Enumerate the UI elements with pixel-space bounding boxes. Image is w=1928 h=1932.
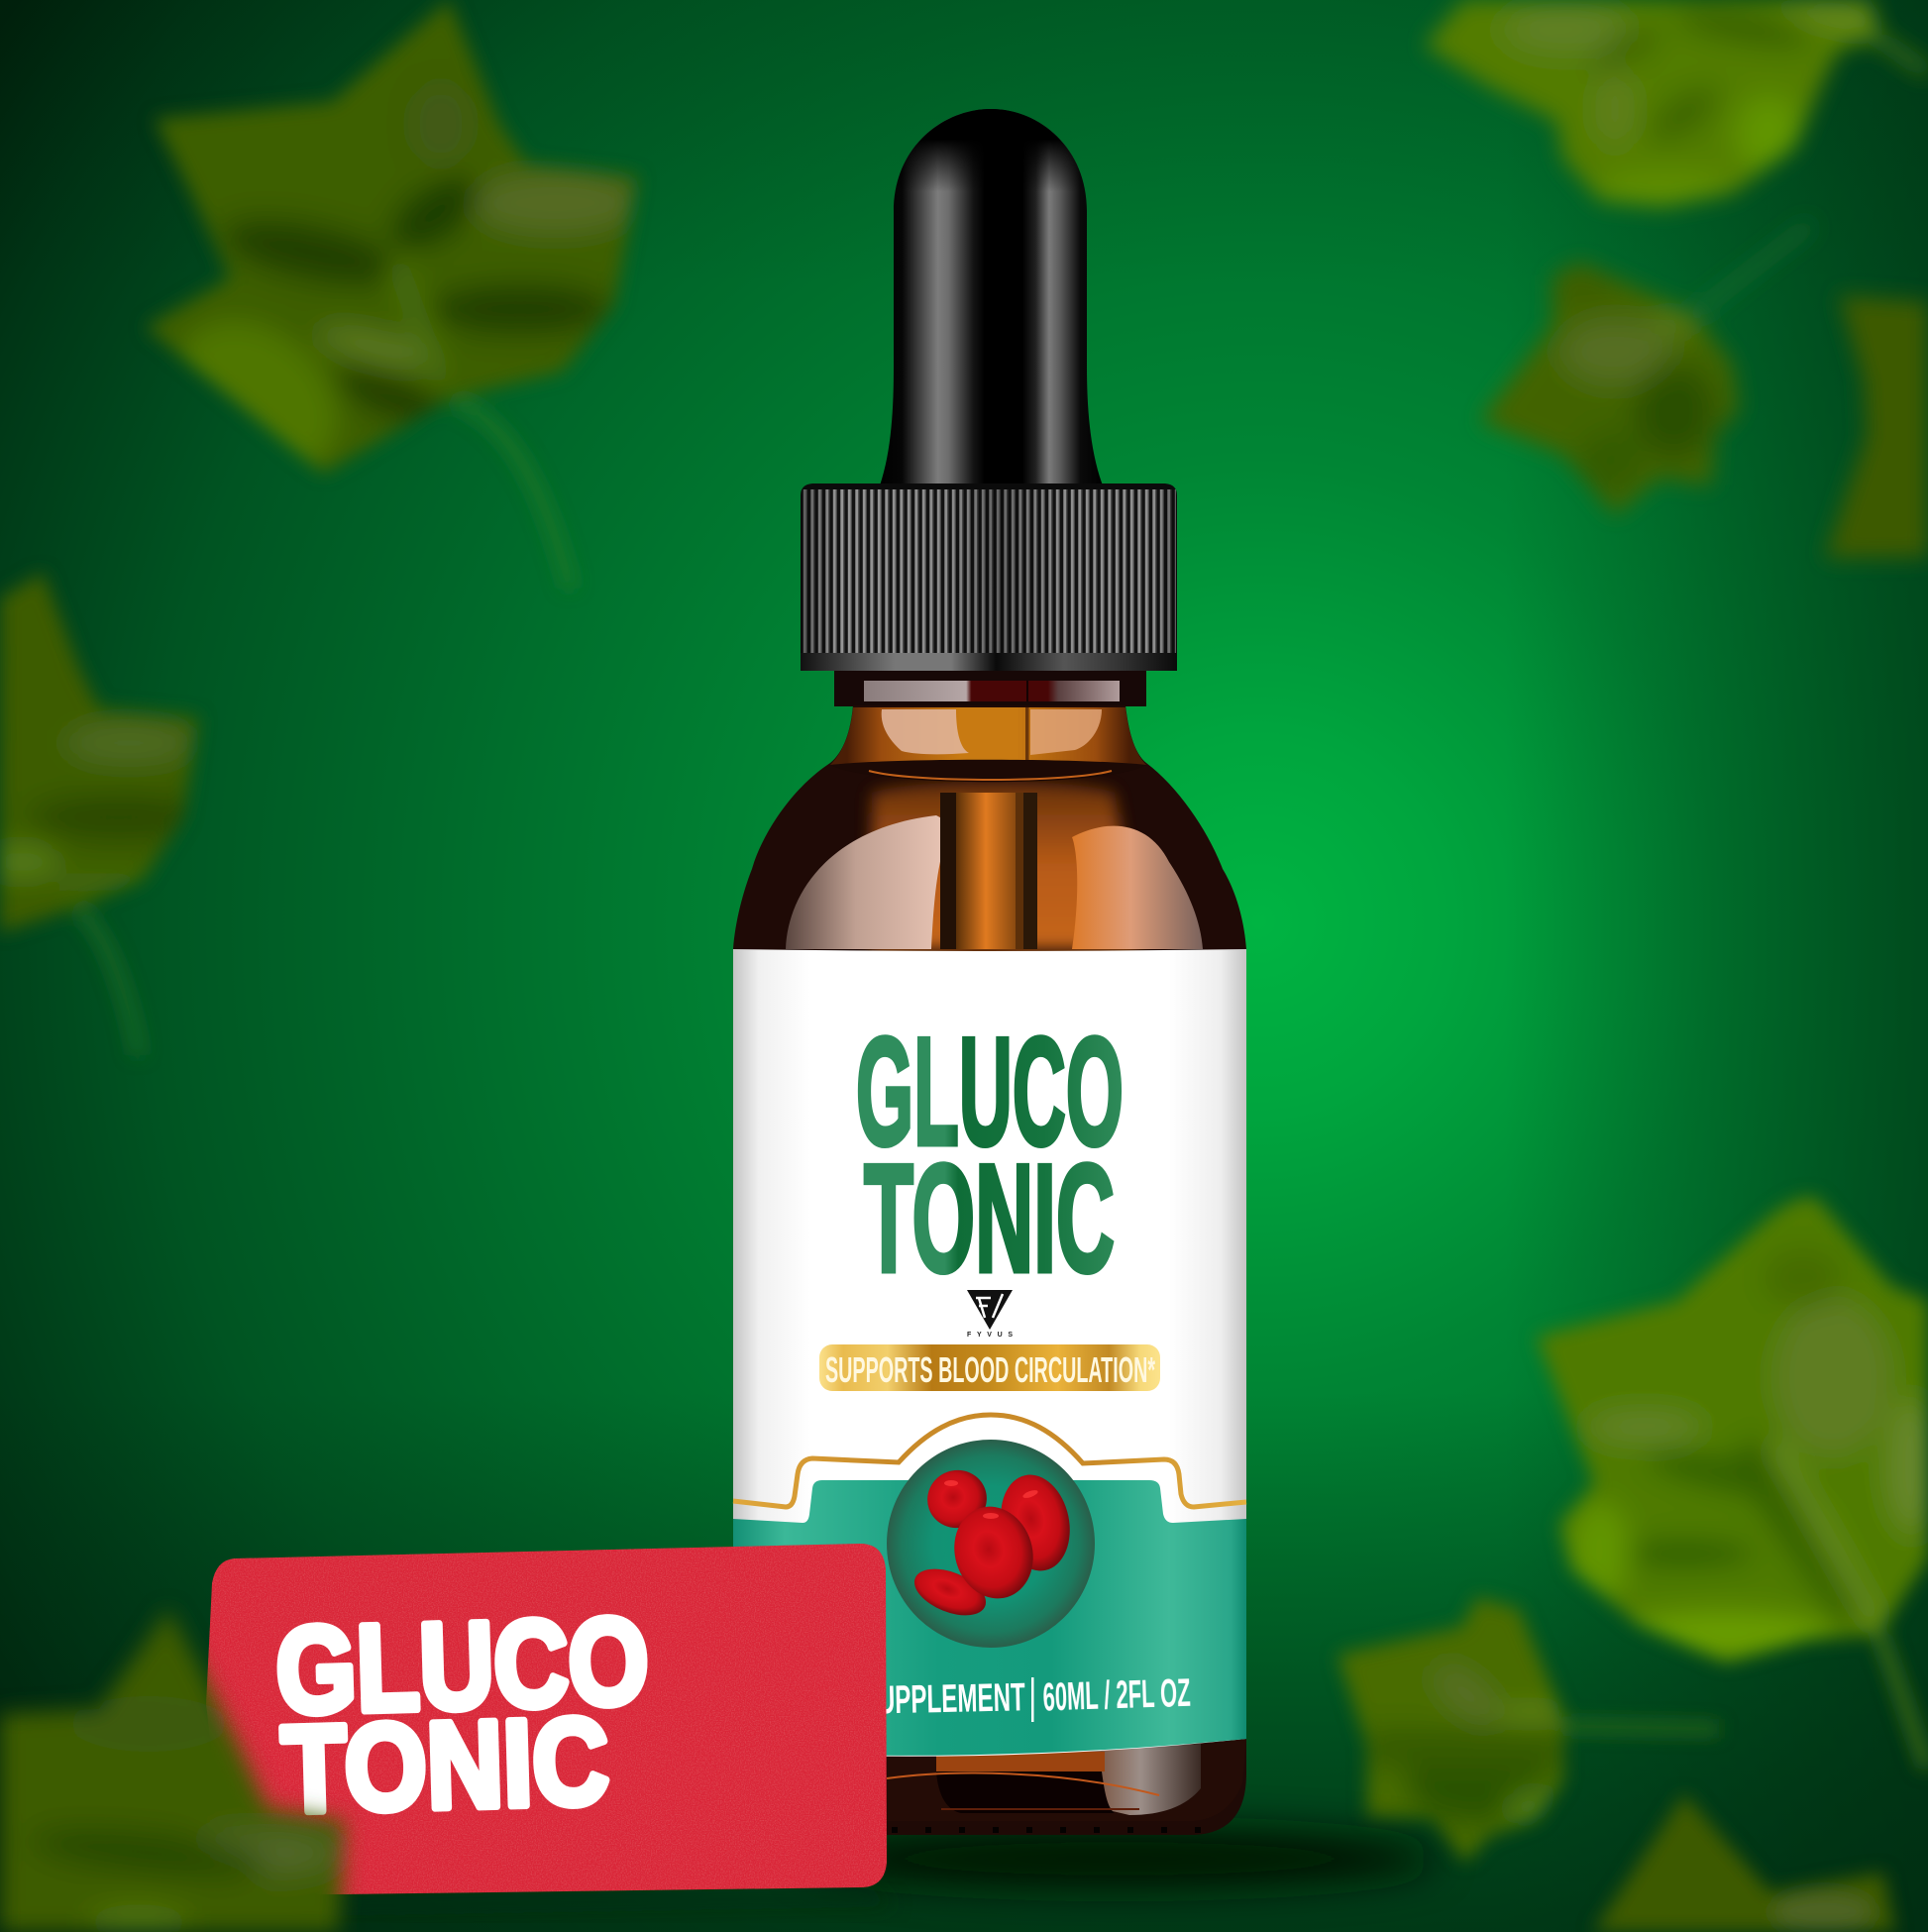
paper label [733,949,1246,1757]
gold arch line [733,1415,1246,1507]
teal label band [733,1480,1246,1756]
amber glass body [733,705,1246,1835]
label brand name [856,1006,1124,1304]
card shadow [297,1887,897,1917]
label brand name: TONIC [864,1132,1115,1304]
leaf: bottom-right large [1526,1189,1928,1769]
paper label: GLUCO [856,1006,1124,1177]
leaf: mid-right [1466,224,1811,525]
red felt card [206,1544,887,1894]
supplement and volume line: SUPPLEMENT [861,1675,1025,1723]
card wordmark: GLUCO [274,1593,651,1740]
FYVUS logo [967,1290,1013,1339]
circle with red blood cells icon [887,1440,1095,1648]
leaf: top-right large [1407,0,1928,218]
bottle floor shadow [803,1829,1437,1888]
glass neck ring [834,671,1146,706]
supplement and volume line: 60ML / 2FL OZ [1042,1671,1191,1719]
leaf: right edge [1825,295,1928,558]
dropper bulb [880,109,1103,485]
leaf: left edge [0,565,208,1055]
gold claim pill: SUPPORTS BLOOD CIRCULATION* [825,1349,1155,1390]
leaf: bottom middle-right [1328,1585,1719,1873]
card wordmark: TONIC [280,1693,610,1839]
leaf: bottom-left foreground [0,1605,347,1932]
bottle [733,109,1246,1835]
gold claim pill [819,1344,1160,1391]
leaf: bottom-right lower [1593,1794,1895,1932]
leaf: large top-left [129,0,654,589]
ribbed cap [801,483,1177,671]
glass base reflections [887,1739,1246,1830]
card wordmark [274,1593,653,1839]
FYVUS logo: FYVUS [967,1332,1013,1339]
